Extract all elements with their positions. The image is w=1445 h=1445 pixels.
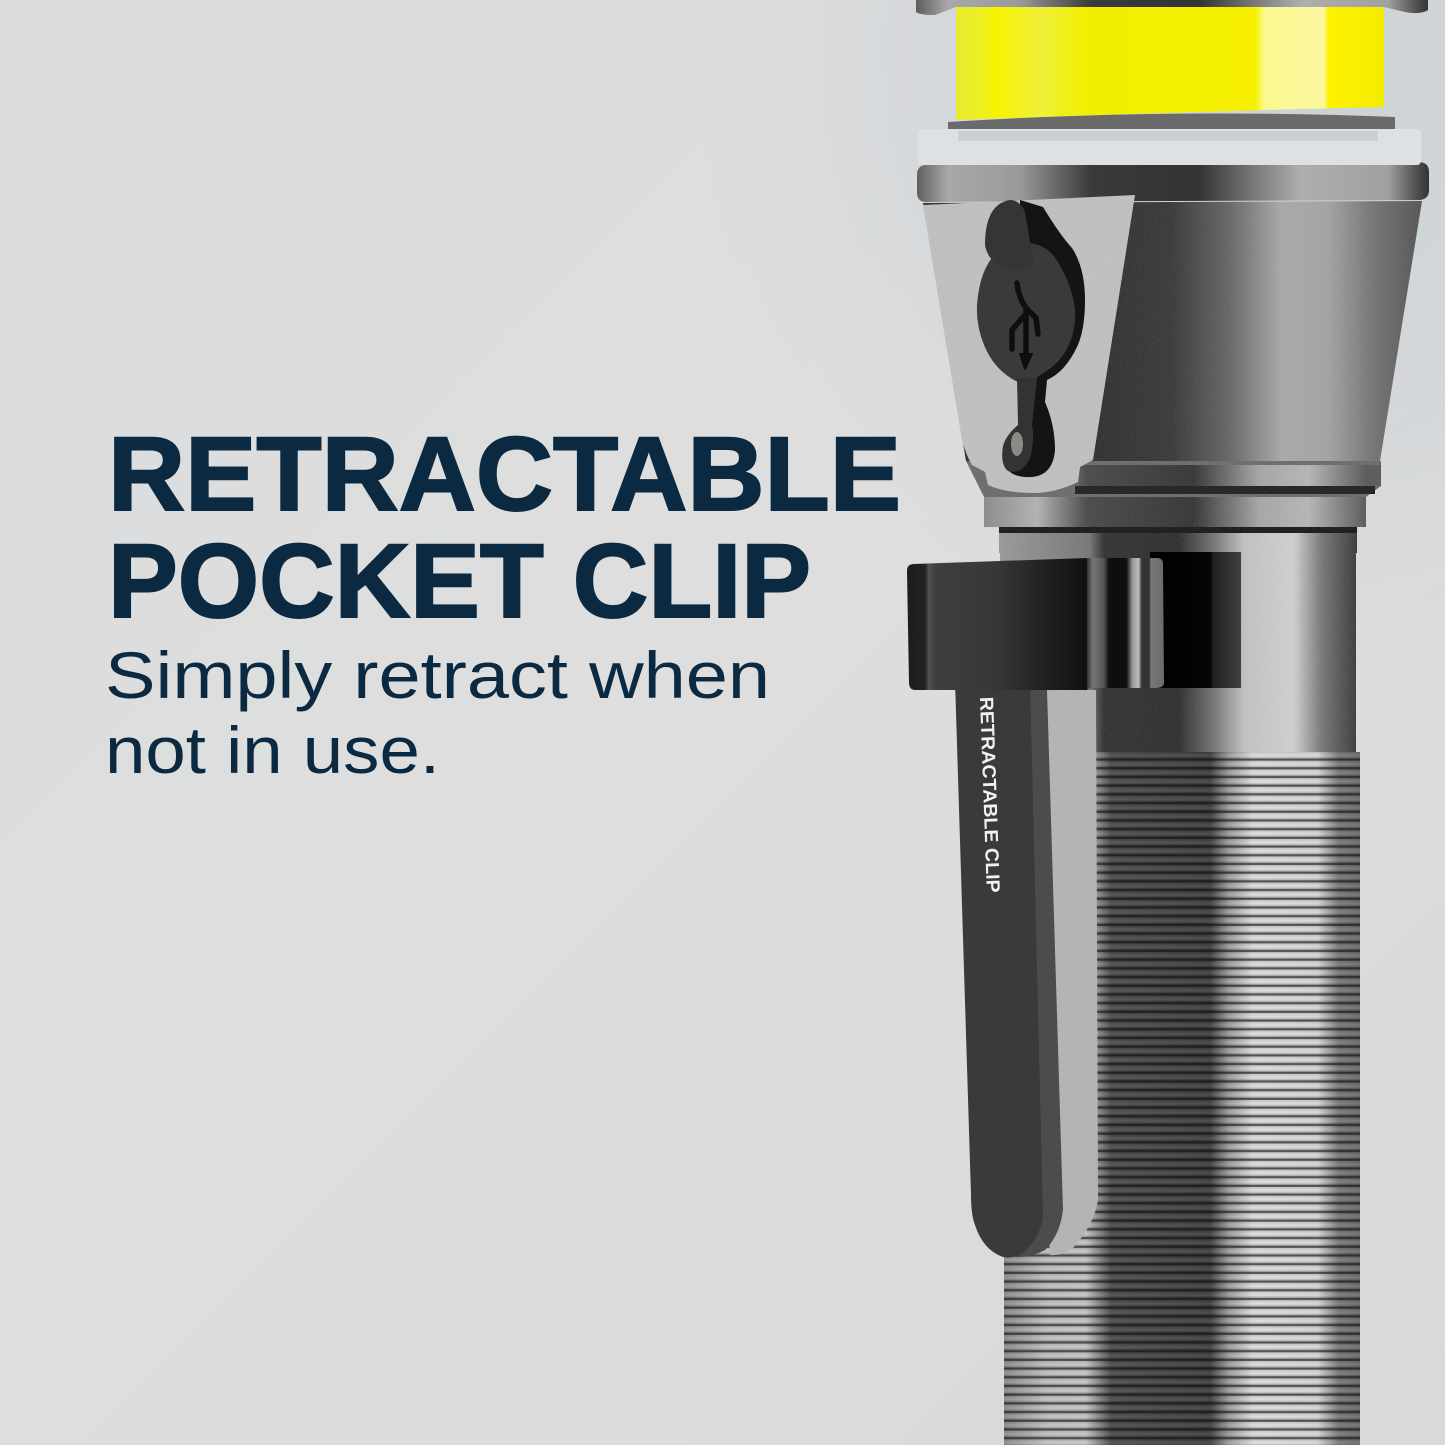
usb rubber cap <box>977 200 1085 477</box>
yellow collar <box>956 6 1384 120</box>
subheading: not in use. <box>105 713 440 787</box>
top ring <box>916 0 1428 15</box>
threaded barrel <box>1004 752 1360 1445</box>
ring under lens <box>948 113 1395 129</box>
smooth barrel <box>1000 534 1356 752</box>
usb symbol <box>1012 283 1038 369</box>
clip label: RETRACTABLE CLIP <box>975 696 1003 893</box>
clip stem <box>955 680 1043 1258</box>
silver recess strip <box>1030 690 1098 1255</box>
pocket clip slot <box>1150 552 1241 688</box>
subheading <box>105 638 770 787</box>
metal grain <box>920 195 1430 755</box>
translucent ring <box>918 129 1421 165</box>
heading: POCKET CLIP <box>108 523 811 640</box>
ring highlight <box>958 131 1378 141</box>
cap pin <box>1011 432 1023 456</box>
cap face <box>977 243 1075 383</box>
head cone <box>923 201 1422 461</box>
heading: RETRACTABLE <box>108 416 901 533</box>
head rim <box>917 162 1429 202</box>
head bands <box>966 461 1381 553</box>
cap tail <box>1002 378 1037 472</box>
cap shadow <box>1008 200 1085 477</box>
silver facet <box>923 195 1135 493</box>
heading <box>108 416 901 640</box>
subheading: Simply retract when <box>105 638 770 712</box>
pocket clip <box>907 558 1164 1258</box>
clip grip ridges <box>1087 558 1164 690</box>
cap tab <box>985 200 1034 270</box>
clip bar <box>907 558 1087 690</box>
clip edge <box>1015 690 1063 1257</box>
flashlight <box>907 0 1430 1445</box>
